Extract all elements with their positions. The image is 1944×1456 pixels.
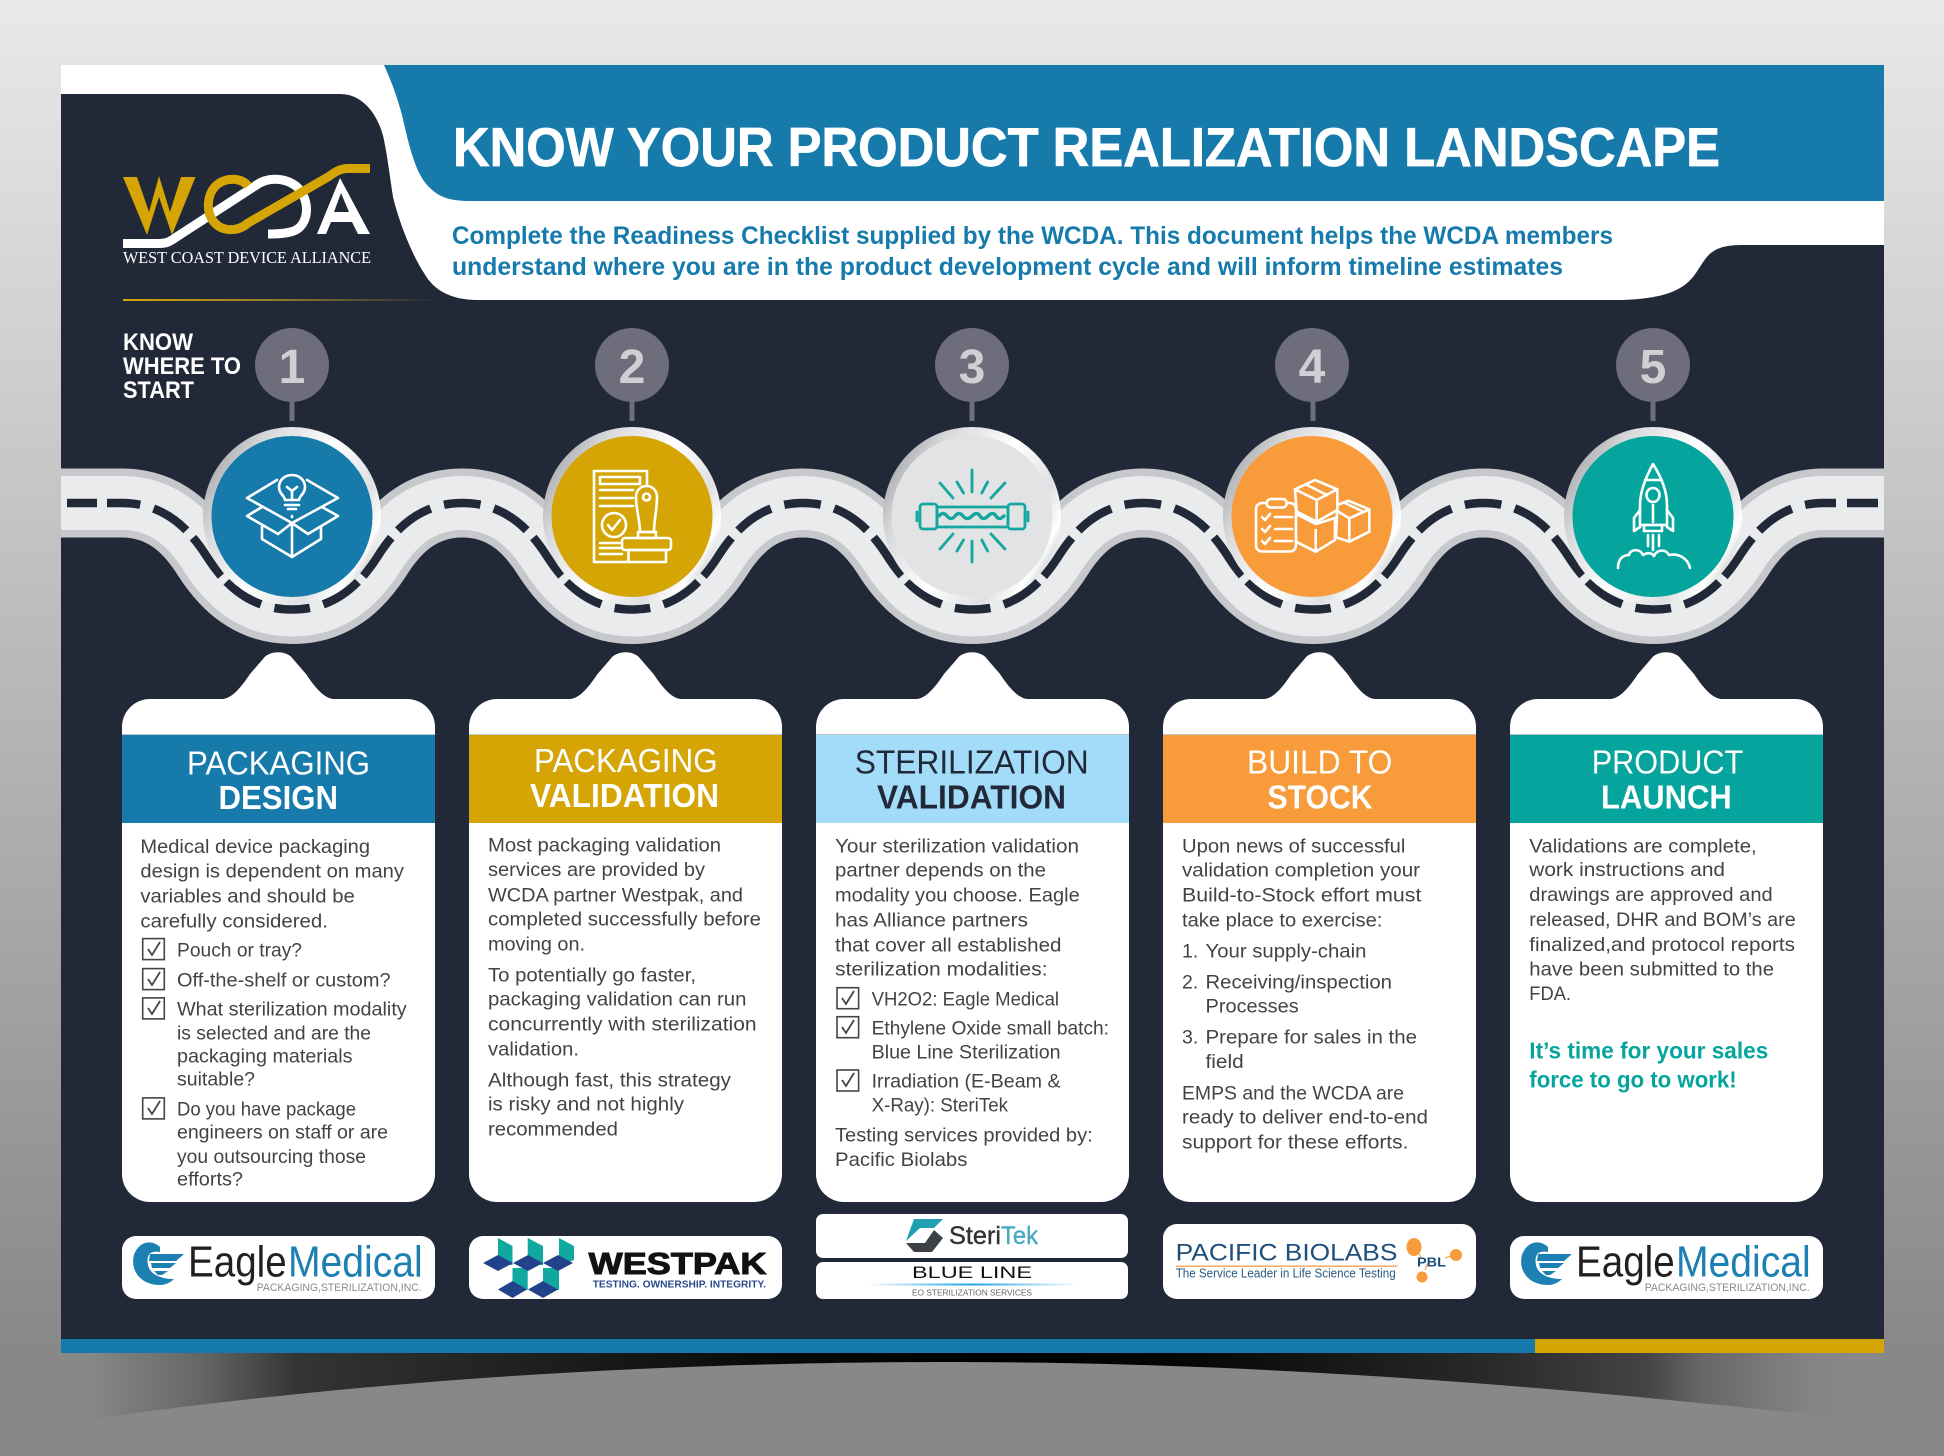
header: sterilization validation: STERILIZATION (855, 743, 1089, 780)
checklist: sterilization modalities: VH2O2: Eagle Medical (872, 988, 1059, 1010)
header: sterilization validation (816, 734, 1129, 823)
logo: Blue Line (816, 1262, 1128, 1299)
text: packaging validation body: services are provided by (488, 859, 705, 881)
text: sterilization intro: that cover all established (835, 934, 1062, 956)
step 2 marker: 2 (619, 341, 645, 394)
logo: Pacific Biolabs: PACIFIC BIOLABS (1176, 1240, 1397, 1267)
text: build to stock body: Upon news of successful (1182, 835, 1405, 857)
text: product launch body: have been submitted to the (1529, 959, 1774, 981)
header: packaging design (122, 734, 435, 823)
text: product launch body: Validations are complete, (1529, 835, 1757, 857)
text: build to stock body: Receiving/inspection (1206, 971, 1392, 993)
text: product launch body: drawings are approved and (1529, 884, 1773, 906)
subtitle: understand where you are in the product development cycle and will inform timeline estimates (452, 253, 1563, 281)
callout: sales force: force to go to work! (1529, 1066, 1737, 1092)
checklist: sterilization modalities: Blue Line Sterilization (872, 1041, 1061, 1063)
checklist: sterilization modalities (837, 988, 1109, 1116)
logo: SteriTek (816, 1214, 1128, 1258)
text: testing services (835, 1125, 1093, 1171)
header: sterilization validation: VALIDATION (877, 778, 1066, 815)
text: build to stock body: ready to deliver end-to-end (1182, 1106, 1428, 1128)
checklist: packaging design: packaging materials (177, 1046, 353, 1068)
icon disc 2: document and stamp (543, 427, 721, 605)
white header shape (61, 65, 1884, 300)
step 2 marker (595, 328, 669, 421)
subtitle (452, 222, 1613, 281)
text: build to stock body: Build-to-Stock effort must (1182, 884, 1422, 906)
step 1 marker (255, 328, 329, 421)
checklist: sterilization modalities: Irradiation (E-Beam & (872, 1070, 1061, 1092)
text: product launch body: released, DHR and BOM’s are (1529, 909, 1796, 931)
logo: Eagle Medical 1: Eagle (188, 1238, 287, 1287)
text: sterilization intro: modality you choose. Eagle (835, 884, 1080, 906)
header: packaging validation (469, 734, 782, 823)
curved drop shadow under panel (85, 1353, 1860, 1420)
text: packaging design intro: carefully considered. (140, 910, 328, 932)
text: testing services: Pacific Biolabs (835, 1149, 968, 1171)
know where to start: START (123, 377, 194, 404)
callout: sales force (1529, 1037, 1768, 1092)
text: build to stock body: Prepare for sales in the (1206, 1026, 1417, 1048)
text: sterilization intro: partner depends on the (835, 860, 1046, 882)
panel: sterilization validation (816, 652, 1129, 1202)
logo: SteriTek: Tek (1001, 1222, 1038, 1250)
checklist: packaging design: Pouch or tray? (177, 939, 302, 961)
panel: build to stock (1163, 652, 1476, 1202)
text: packaging validation body: WCDA partner Westpak, and (488, 884, 743, 906)
text: packaging validation body: completed successfully before (488, 909, 761, 931)
logo: Westpak (469, 1236, 782, 1299)
checklist: packaging design: efforts? (177, 1168, 243, 1190)
text: build to stock body: take place to exercise: (1182, 909, 1382, 931)
header: packaging design: PACKAGING (187, 744, 370, 781)
text: packaging validation body: packaging validation can run (488, 989, 746, 1011)
WCDA logo (123, 168, 371, 267)
know where to start (123, 329, 241, 404)
text: product launch body: finalized,and protocol reports (1529, 934, 1795, 956)
icon disc 4: boxes and checklist (1223, 427, 1401, 605)
text: packaging design intro: design is dependent on many (140, 860, 404, 882)
header: build to stock: BUILD TO (1247, 743, 1392, 780)
step 4 marker: 4 (1299, 341, 1326, 394)
text: packaging validation body: validation. (488, 1038, 579, 1060)
logo: Eagle Medical 1: Medical (288, 1238, 423, 1287)
step 4 marker (1275, 328, 1349, 421)
text: build to stock body: 3. (1182, 1026, 1198, 1048)
text: sterilization intro (835, 835, 1080, 980)
header: packaging design: DESIGN (218, 779, 338, 816)
text: product launch body (1528, 835, 1796, 1005)
footer bar (61, 1339, 1884, 1353)
checklist: packaging design: engineers on staff or are (177, 1122, 388, 1144)
step 3 marker (935, 328, 1009, 421)
checklist: packaging design: is selected and are the (177, 1022, 371, 1044)
text: packaging design intro (140, 836, 404, 932)
text: packaging validation body: To potentially go faster, (488, 964, 696, 986)
know where to start: KNOW (123, 329, 193, 356)
text: packaging design intro: Medical device packaging (140, 836, 370, 858)
logo: Pacific Biolabs: The Service Leader in Life Science Testing (1176, 1267, 1396, 1281)
text: packaging design intro: variables and should be (140, 886, 355, 908)
text: sterilization intro: has Alliance partners (835, 909, 1028, 931)
logo: Pacific Biolabs: PBL (1417, 1255, 1446, 1270)
checklist: packaging design: What sterilization modality (177, 998, 407, 1020)
blue title band (384, 65, 1884, 201)
logo: Eagle Medical 1 (122, 1236, 435, 1299)
text: packaging validation body: concurrently with sterilization (488, 1013, 757, 1035)
checklist: packaging design: you outsourcing those (177, 1146, 366, 1168)
text: build to stock body: Processes (1206, 995, 1299, 1017)
text: build to stock body: EMPS and the WCDA are (1182, 1082, 1404, 1104)
logo: Eagle Medical 2 (1510, 1236, 1823, 1299)
checklist: packaging design: suitable? (177, 1068, 255, 1090)
gold divider (123, 299, 440, 301)
header: product launch: PRODUCT (1592, 743, 1743, 780)
title: KNOW YOUR PRODUCT REALIZATION LANDSCAPE (453, 116, 1720, 178)
panel: packaging design (122, 652, 435, 1202)
road (61, 503, 1884, 610)
know where to start: WHERE TO (123, 353, 241, 380)
checklist: packaging design: Off-the-shelf or custom? (177, 969, 391, 991)
header: packaging validation: PACKAGING (534, 742, 718, 779)
text: build to stock body: Your supply-chain (1206, 940, 1366, 962)
logo: Blue Line: EO STERILIZATION SERVICES (912, 1289, 1032, 1298)
header: product launch: LAUNCH (1601, 778, 1732, 815)
icon disc 5: rocket (1564, 427, 1742, 605)
text: build to stock body: 2. (1182, 971, 1198, 993)
text: packaging validation body: recommended (488, 1118, 618, 1140)
step 3 marker: 3 (959, 341, 985, 394)
checklist: packaging design: Do you have package (177, 1099, 356, 1121)
text: sterilization intro: sterilization modalities: (835, 958, 1048, 980)
panel: product launch (1510, 652, 1823, 1202)
logo: SteriTek: Steri (949, 1222, 1001, 1250)
header: product launch (1510, 734, 1823, 823)
text: packaging validation body: moving on. (488, 934, 585, 956)
text: build to stock body: 1. (1182, 940, 1198, 962)
text: build to stock body: support for these efforts. (1182, 1131, 1408, 1153)
icon disc 1: box with bulb (203, 427, 381, 605)
text: build to stock body: validation completion your (1182, 860, 1421, 882)
checklist: sterilization modalities: Ethylene Oxide small batch: (872, 1017, 1109, 1039)
header: packaging validation: VALIDATION (530, 777, 719, 814)
logo: Westpak: TESTING. OWNERSHIP. INTEGRITY. (593, 1279, 766, 1291)
text: packaging validation body: Although fast, this strategy (488, 1069, 731, 1091)
checklist: sterilization modalities: X-Ray): SteriTek (872, 1094, 1008, 1116)
subtitle: Complete the Readiness Checklist supplied by the WCDA. This document helps the WCDA members (452, 222, 1613, 250)
text: product launch body: FDA. (1529, 983, 1571, 1005)
text: packaging validation body (488, 834, 761, 1140)
step 1 marker: 1 (279, 341, 305, 394)
text: packaging validation body: Most packaging validation (488, 834, 721, 856)
logo: Pacific Biolabs (1163, 1224, 1476, 1299)
text: sterilization intro: Your sterilization validation (835, 835, 1079, 857)
header: build to stock: STOCK (1268, 778, 1373, 815)
logo: Blue Line: BLUE LINE (912, 1263, 1032, 1282)
logo: Westpak: WESTPAK (589, 1246, 767, 1281)
header: build to stock (1163, 734, 1476, 823)
logo: Eagle Medical 1: PACKAGING,STERILIZATION,INC. (257, 1282, 422, 1294)
callout: sales force: It’s time for your sales (1529, 1037, 1768, 1063)
checklist: packaging design (143, 939, 407, 1190)
logo: Eagle Medical 2: Medical (1676, 1238, 1811, 1287)
text: packaging validation body: is risky and not highly (488, 1094, 684, 1116)
text: build to stock body (1182, 835, 1428, 1153)
text: testing services: Testing services provided by: (835, 1125, 1093, 1147)
text: build to stock body: field (1206, 1051, 1244, 1073)
WCDA logo: WEST COAST DEVICE ALLIANCE (123, 248, 371, 267)
logo: Eagle Medical 2: PACKAGING,STERILIZATION,INC. (1645, 1282, 1810, 1294)
panel: packaging validation (469, 652, 782, 1202)
text: product launch body: work instructions and (1528, 859, 1725, 881)
step 5 marker (1616, 328, 1690, 421)
step 5 marker: 5 (1640, 341, 1666, 394)
logo: Eagle Medical 2: Eagle (1576, 1238, 1675, 1287)
icon disc 3: UV tube (883, 427, 1061, 605)
